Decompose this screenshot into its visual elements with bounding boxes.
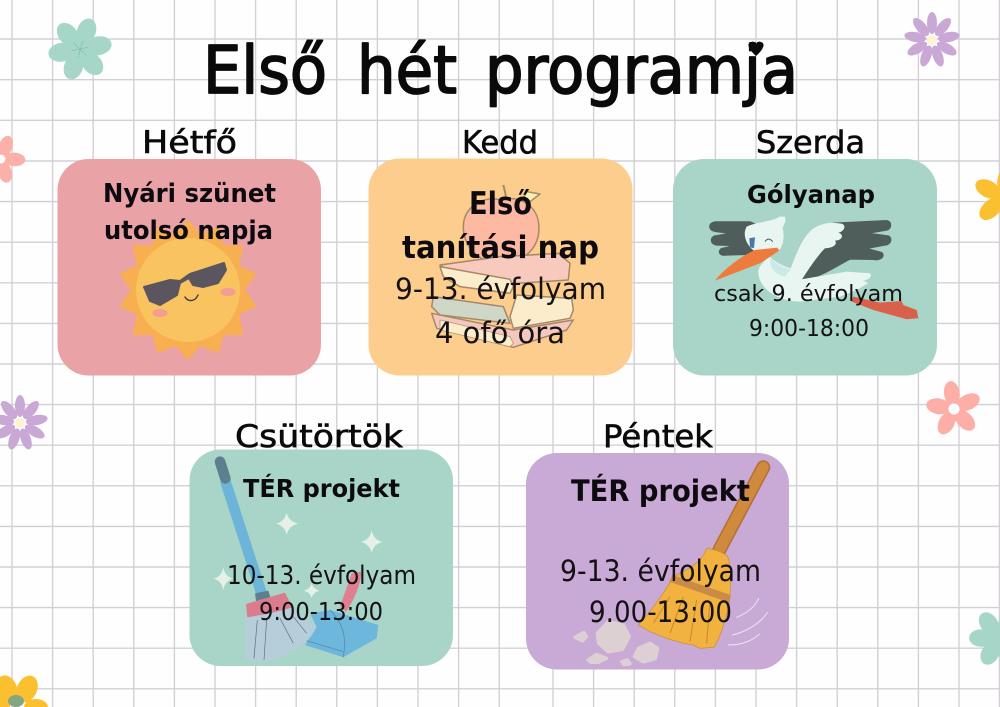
- text: TÉR projekt: TÉR projekt: [243, 474, 400, 503]
- flower: teal bottom right: [969, 608, 1000, 668]
- flower: yellow bottom left: [0, 672, 48, 707]
- panel: Péntek: [526, 453, 789, 670]
- flower: purple top right: [904, 12, 960, 68]
- text: TÉR projekt: TÉR projekt: [571, 474, 750, 508]
- text: csak 9. évfolyam 9:00-18:00: csak 9. évfolyam: [714, 282, 903, 307]
- panel: Szerda: [673, 159, 937, 376]
- title: hét: [357, 32, 457, 109]
- text: 9-13. évfolyam 9.00-13:00: 9-13. évfolyam: [560, 554, 761, 588]
- text: Nyári szünet utolsó napja: Nyári szünet: [103, 179, 276, 209]
- day heading: Szerda: Szerda: [756, 125, 865, 161]
- panel: Kedd: [368, 158, 632, 376]
- flower: pink right: [921, 377, 987, 440]
- day heading: Hétfő: Hétfő: [142, 125, 237, 161]
- icon: blue broom, dustpan and sparkles: [213, 462, 383, 661]
- text: 9-13. évfolyam, 4 ofő óra: 9-13. évfolyam: [395, 272, 606, 306]
- text: csak 9. évfolyam 9:00-18:00: 9:00-18:00: [749, 314, 869, 342]
- text: Gólyanap: Gólyanap: [747, 180, 875, 209]
- text: 9-13. évfolyam 9.00-13:00: 9.00-13:00: [589, 595, 732, 629]
- flower: yellow right edge: [967, 161, 1000, 232]
- text: Első tanítási nap: tanítási nap: [402, 230, 599, 266]
- text: 10-13. évfolyam 9:00-13:00: 10-13. évfolyam: [227, 561, 416, 591]
- text: Nyári szünet utolsó napja: [103, 179, 276, 246]
- text: csak 9. évfolyam 9:00-18:00: [714, 282, 903, 342]
- day heading: Csütörtök: Csütörtök: [235, 419, 403, 455]
- text: 9-13. évfolyam, 4 ofő óra: 4 ofő óra: [435, 316, 565, 350]
- title: Első: [203, 32, 327, 109]
- icon: apple on books: [432, 185, 573, 347]
- text: 10-13. évfolyam 9:00-13:00: 9:00-13:00: [259, 597, 383, 626]
- day heading: Péntek: Péntek: [603, 419, 713, 455]
- text: 9-13. évfolyam 9.00-13:00: [560, 554, 761, 629]
- text: Nyári szünet utolsó napja: utolsó napja: [104, 216, 273, 246]
- day heading: Kedd: Kedd: [462, 125, 538, 161]
- icon: flying stork: [710, 217, 918, 319]
- title: [203, 32, 798, 109]
- text: 9-13. évfolyam, 4 ofő óra: [395, 272, 606, 350]
- flower: pink left edge: [0, 127, 33, 190]
- text: Első tanítási nap: [402, 186, 599, 266]
- icon: straw broom with dust: [575, 467, 767, 665]
- panel: Hétfő: [58, 159, 321, 376]
- text: Első tanítási nap: Első: [469, 186, 532, 222]
- text: 10-13. évfolyam 9:00-13:00: [227, 561, 416, 626]
- flower: teal top left: [47, 16, 113, 82]
- flower: purple left: [0, 395, 48, 451]
- panel: Csütörtök: [190, 450, 453, 666]
- title: programja: [485, 32, 798, 109]
- icon: sun with sunglasses: [121, 221, 255, 359]
